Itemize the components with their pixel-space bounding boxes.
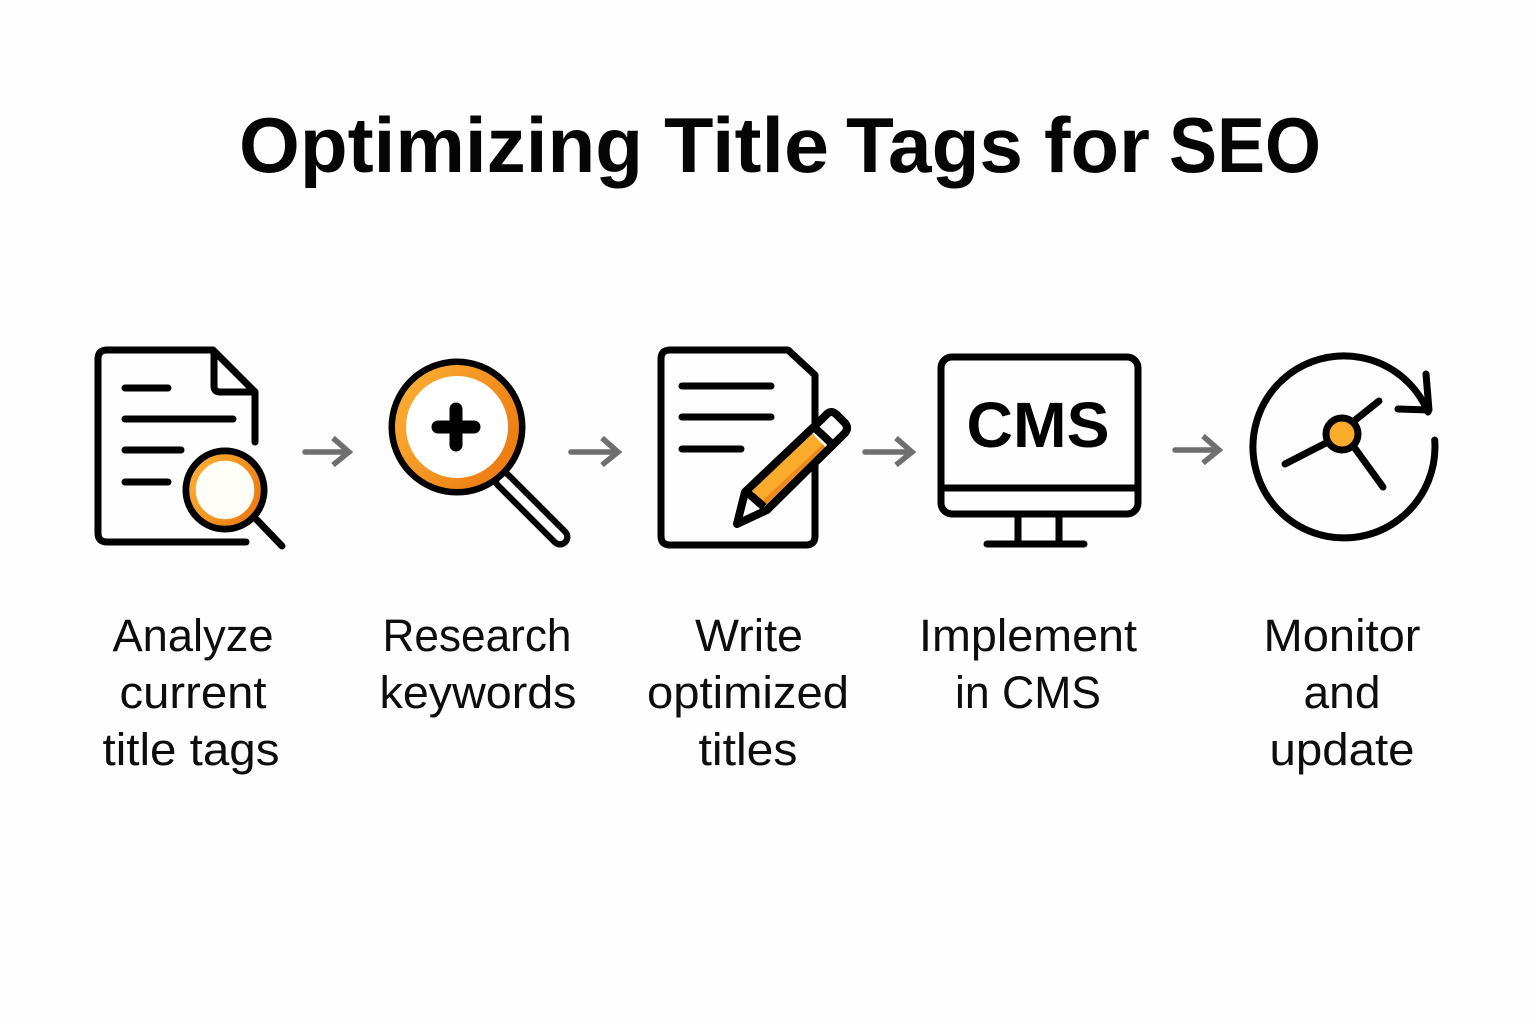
- arrow 1: [305, 438, 349, 465]
- label: write: [647, 610, 849, 775]
- label: write: titles: [698, 724, 798, 775]
- label: monitor: Monitor: [1264, 610, 1421, 661]
- icon: document with magnifier: [98, 350, 282, 546]
- icon: clock with refresh arrow: [1253, 356, 1435, 538]
- arrow 2: [571, 438, 618, 465]
- title: [239, 101, 1321, 189]
- label: analyze: title tags: [102, 724, 280, 775]
- label: write: Write: [695, 610, 803, 661]
- label: analyze: [102, 610, 280, 775]
- label: write: optimized: [647, 667, 849, 718]
- title: Optimizing: [239, 101, 643, 189]
- icon: CMS monitor: [941, 357, 1138, 544]
- title: SEO: [1169, 101, 1321, 189]
- label: implement: in CMS: [955, 667, 1101, 718]
- label: analyze: current: [120, 667, 267, 718]
- icon: document with pencil: [661, 350, 847, 545]
- title: Tags: [846, 101, 1023, 189]
- label: implement: [919, 610, 1138, 718]
- title: for: [1044, 101, 1150, 189]
- label: monitor: update: [1270, 724, 1414, 775]
- arrow 3: [865, 438, 912, 465]
- label: monitor: and: [1304, 667, 1380, 718]
- label: monitor: [1264, 610, 1421, 775]
- label: implement: Implement: [919, 610, 1138, 661]
- icon: magnifier with plus: [392, 362, 560, 537]
- label: research: keywords: [380, 667, 576, 718]
- arrow 4: [1175, 436, 1219, 463]
- icon: CMS monitor: CMS: [966, 389, 1110, 461]
- title: Title: [664, 101, 829, 189]
- label: research: Research: [382, 610, 572, 661]
- label: analyze: Analyze: [112, 610, 274, 661]
- label: research: [380, 610, 576, 718]
